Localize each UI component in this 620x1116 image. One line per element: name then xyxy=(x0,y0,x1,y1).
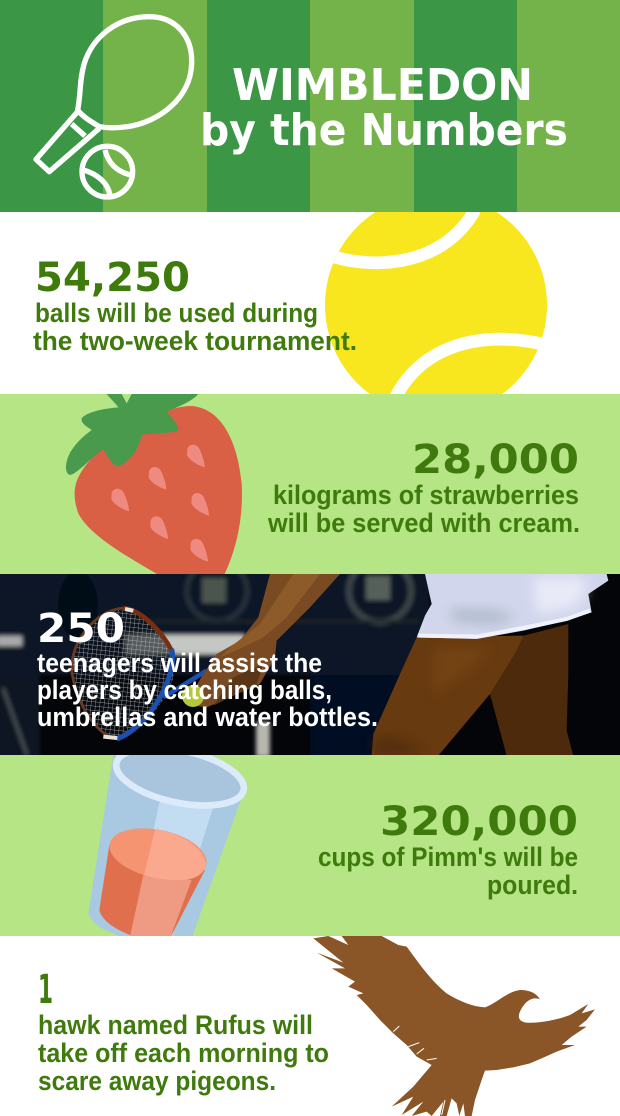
stat: 28,000 kilograms: kilograms of strawberries xyxy=(273,480,579,510)
player arm and hand xyxy=(185,574,340,707)
panel: ball kids photo xyxy=(0,560,620,760)
stat: 320,000 cups xyxy=(318,799,578,900)
icon: tennis racket xyxy=(36,17,192,172)
icon: strawberry xyxy=(66,394,242,577)
panel: header xyxy=(0,0,620,212)
stat: 320,000 cups: cups of Pimm's will be xyxy=(318,842,578,872)
stat: 250 teenagers xyxy=(37,606,378,732)
stat: 250 teenagers: 250 xyxy=(37,606,125,652)
seeds xyxy=(111,445,209,562)
stat: 1 hawk: 1 xyxy=(38,967,53,1013)
icon: hawk silhouette xyxy=(313,936,595,1116)
stat: 28,000 kilograms: will be served with cream. xyxy=(267,508,580,538)
stat: 54,250 balls: the two-week tournament. xyxy=(33,326,357,356)
stat: 250 teenagers: teenagers will assist the xyxy=(37,648,322,678)
stat: 54,250 balls xyxy=(33,255,357,356)
stat: 54,250 balls: balls will be used during xyxy=(35,298,318,328)
stat: 320,000 cups: poured. xyxy=(487,870,578,900)
panel: strawberries xyxy=(0,394,620,577)
player legs xyxy=(372,624,573,756)
player skirt xyxy=(417,574,608,639)
stat: 320,000 cups: 320,000 xyxy=(380,799,578,845)
panel: balls xyxy=(33,212,547,394)
stat: 1 hawk: scare away pigeons. xyxy=(38,1066,276,1096)
stat: 28,000 kilograms xyxy=(267,437,580,538)
panel: hawk xyxy=(38,936,595,1116)
stat: 54,250 balls: 54,250 xyxy=(35,255,190,301)
stat: 1 hawk: take off each morning to xyxy=(38,1038,329,1068)
title xyxy=(200,60,568,156)
icon: tennis ball outline xyxy=(82,146,133,197)
ball in hand xyxy=(182,685,204,707)
stat: 250 teenagers: players by catching balls, xyxy=(37,675,332,705)
photo background xyxy=(0,560,430,760)
stat: 28,000 kilograms: 28,000 xyxy=(412,437,579,483)
stat: 1 hawk xyxy=(38,967,329,1096)
icon: yellow tennis ball xyxy=(325,212,547,394)
stat: 1 hawk: hawk named Rufus will xyxy=(38,1010,313,1040)
stat: 250 teenagers: umbrellas and water bottles. xyxy=(37,702,378,732)
racket xyxy=(72,608,207,739)
panel: Pimm's xyxy=(0,738,620,938)
icon: glass of Pimm's xyxy=(88,755,248,936)
title: by the Numbers xyxy=(200,105,568,156)
title: WIMBLEDON xyxy=(232,60,533,111)
